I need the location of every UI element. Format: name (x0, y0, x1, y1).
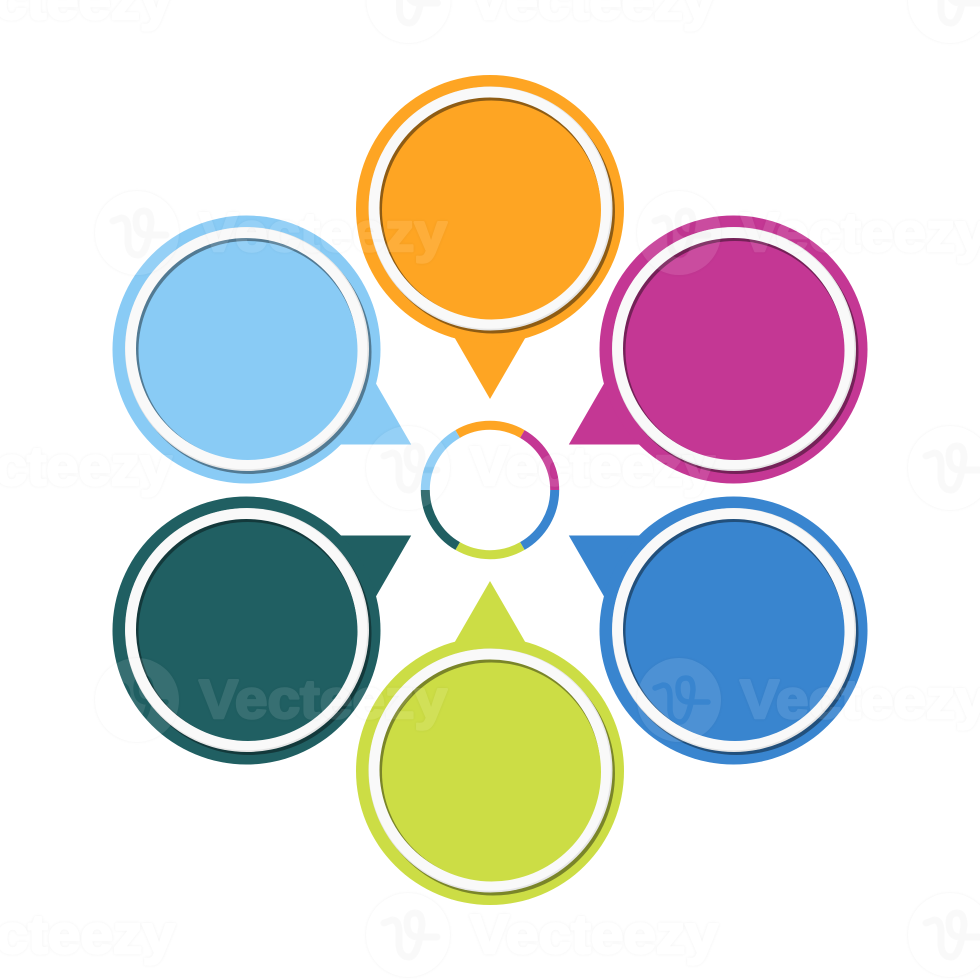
badge: orange (356, 75, 624, 399)
badge: light blue (112, 216, 434, 484)
watermark overlay: Vecteezy (740, 668, 980, 730)
badge: dark teal (112, 496, 434, 764)
badge: lime green (356, 581, 624, 905)
watermark overlay: Vecteezy (470, 903, 718, 965)
center segmented ring (425, 425, 555, 555)
watermark overlay: Vecteezy (199, 668, 447, 730)
watermark overlay: Vecteezy (740, 201, 980, 263)
badge: magenta (546, 216, 868, 484)
watermark overlay: Vecteezy (199, 201, 447, 263)
watermark overlay: Vecteezy (470, 435, 715, 497)
badge: blue (546, 496, 868, 764)
